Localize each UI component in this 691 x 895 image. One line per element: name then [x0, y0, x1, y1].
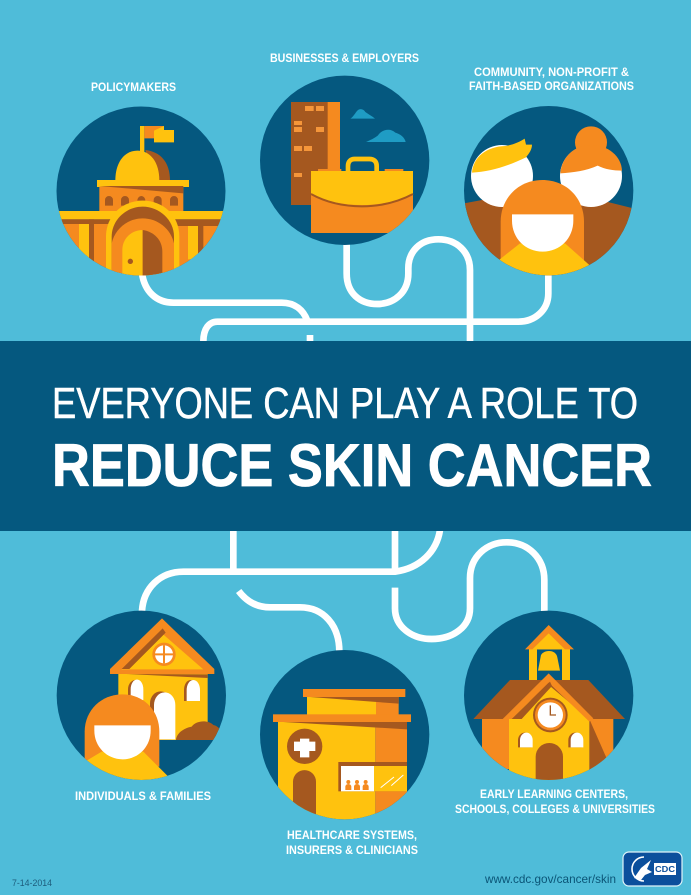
- icon: office tower and briefcase in circle: [260, 76, 429, 245]
- label: community organizations: [469, 65, 634, 93]
- label: healthcare systems: INSURERS & CLINICIANS: [286, 843, 418, 857]
- label: businesses and employers: BUSINESSES & EMPLOYERS: [270, 51, 419, 65]
- icon: schoolhouse in circle: [464, 611, 633, 780]
- label: policymakers: POLICYMAKERS: [91, 80, 176, 94]
- icon: cdc logo: [623, 852, 682, 886]
- label: early learning centers: EARLY LEARNING CENTERS,: [480, 787, 628, 801]
- icon: cdc logo: CDC: [655, 865, 675, 874]
- date stamp: 7-14-2014: [12, 878, 52, 888]
- connector lines below the banner: [142, 530, 544, 652]
- label: community organizations: COMMUNITY, NON-PROFIT &: [474, 65, 629, 79]
- connector lines above the banner: [142, 239, 548, 342]
- icon: healthcare building in circle: [260, 650, 429, 820]
- label: healthcare systems: HEALTHCARE SYSTEMS,: [287, 828, 417, 842]
- label: early learning centers: [455, 787, 655, 816]
- label: community organizations: FAITH-BASED ORGANIZATIONS: [469, 79, 634, 93]
- icon: house and person in circle: [57, 611, 226, 782]
- label: early learning centers: SCHOOLS, COLLEGES & UNIVERSITIES: [455, 802, 655, 816]
- label: healthcare systems: [286, 828, 418, 857]
- icon: three community people in circle: [464, 106, 633, 280]
- website url: www.cdc.gov/cancer/skin: [484, 872, 616, 886]
- label: individuals and families: INDIVIDUALS & FAMILIES: [75, 789, 211, 803]
- icon: capitol building in circle: [56, 106, 226, 277]
- banner: [0, 341, 691, 531]
